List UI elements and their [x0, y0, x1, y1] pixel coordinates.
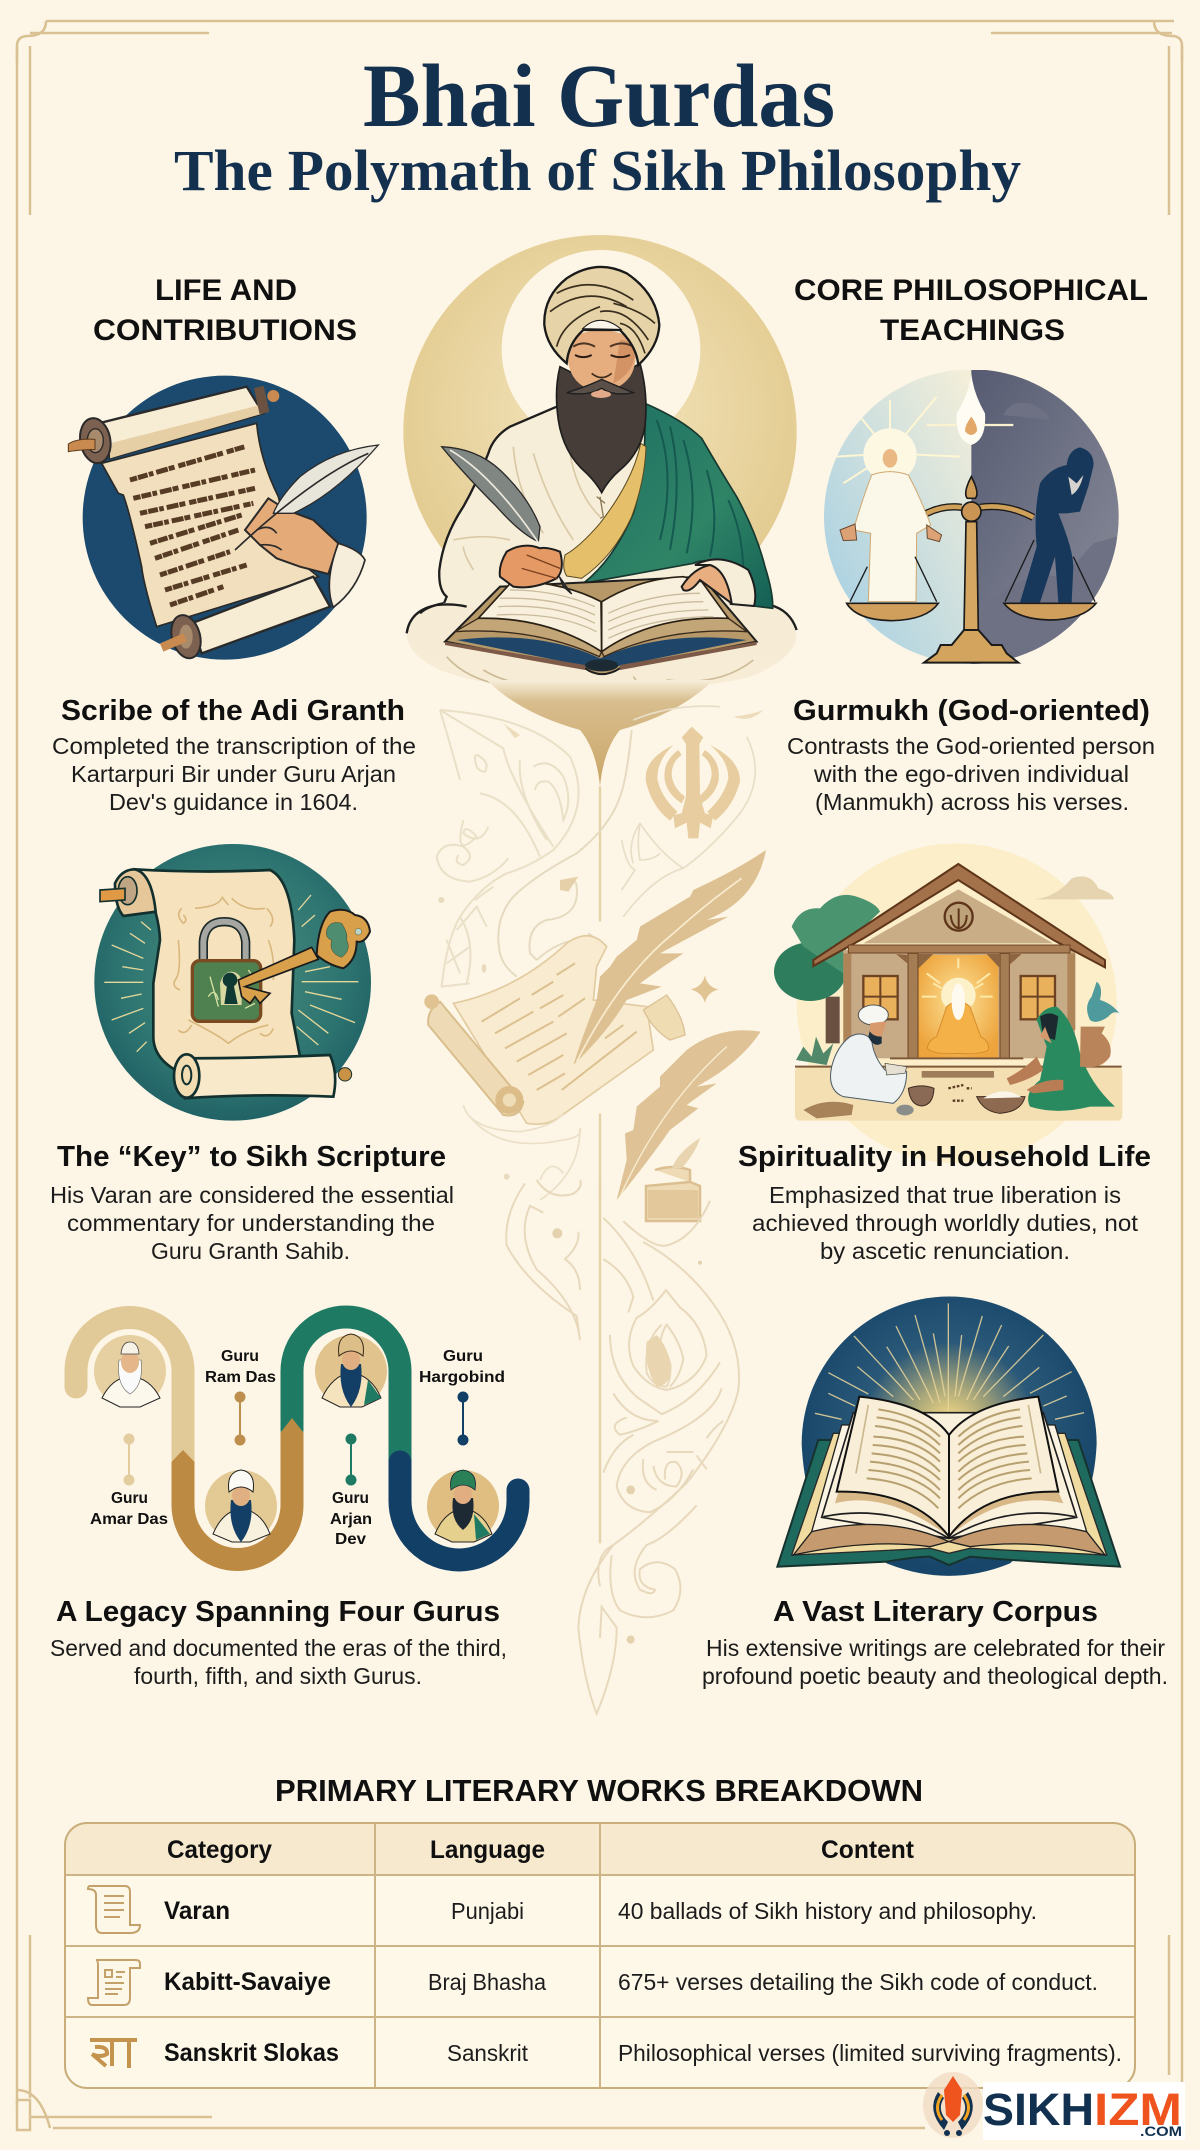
connector: Guru Ram Das — [235, 1392, 245, 1445]
connector: Guru Arjan Dev — [346, 1434, 356, 1485]
left hand with quill — [442, 447, 572, 594]
row: Varan — [88, 1886, 1037, 1933]
logo: Sikhizm.com: SIKH — [983, 2084, 1094, 2135]
row: Varan: Punjabi — [451, 1898, 524, 1924]
text block: spirituality in household life: by ascetic renunciation. — [820, 1238, 1070, 1264]
heading: core philosophical teachings — [794, 274, 1148, 347]
hand holding quill — [235, 445, 378, 607]
right hand on book — [682, 565, 732, 603]
text block: a vast literary corpus: His extensive writings are celebrated for their — [706, 1635, 1165, 1661]
row: Kabitt-Savaiye: Kabitt-Savaiye — [164, 1968, 331, 1996]
text block: spirituality in household life: Spirituality in Household Life — [738, 1141, 1151, 1173]
open book — [445, 577, 757, 674]
connector: Guru Amar Das — [124, 1434, 134, 1485]
text block: a legacy spanning four gurus: A Legacy Spanning Four Gurus — [56, 1596, 500, 1628]
row: Sanskrit Slokas — [90, 2039, 1122, 2068]
glowing meditating figure — [922, 958, 993, 1054]
portrait: Guru Arjan Dev — [315, 1334, 387, 1407]
portrait: Guru Ram Das — [205, 1470, 277, 1542]
connector: Guru Hargobind — [458, 1392, 468, 1445]
logo: Sikhizm.com — [923, 2072, 1185, 2140]
heading: life and contributions: LIFE AND — [155, 274, 297, 307]
text block: a vast literary corpus: profound poetic beauty and theological depth. — [702, 1663, 1168, 1689]
small quill feather — [617, 1030, 761, 1200]
guru name labels: Guru — [111, 1490, 148, 1507]
row: Sanskrit Slokas: Sanskrit — [447, 2040, 529, 2066]
robed body — [407, 403, 797, 717]
guru name labels: Ram Das — [205, 1369, 276, 1386]
icon: scroll and quill in navy circle — [68, 376, 378, 662]
text block: gurmukh: with the ego-driven individual — [813, 761, 1129, 787]
text block: a legacy spanning four gurus: Served and documented the eras of the third, — [50, 1635, 507, 1661]
table heading: PRIMARY LITERARY WORKS BREAKDOWN — [275, 1773, 923, 1808]
row: Kabitt-Savaiye — [88, 1960, 1098, 2005]
guru name labels: Guru — [332, 1490, 369, 1507]
logo: Sikhizm.com: IZM — [1094, 2084, 1182, 2135]
text block: gurmukh: Gurmukh (God-oriented) — [793, 695, 1150, 727]
despairing figure — [1020, 447, 1093, 602]
heading: life and contributions — [93, 274, 357, 347]
parchment scroll — [424, 936, 685, 1124]
green shawl with gold band — [564, 403, 773, 608]
heading: life and contributions: CONTRIBUTIONS — [93, 314, 357, 347]
sparkle — [691, 975, 718, 1003]
guru name labels: Arjan — [330, 1511, 372, 1528]
text block: the key to sikh scripture: commentary for understanding the — [67, 1210, 435, 1236]
portrait: Guru Amar Das — [94, 1335, 166, 1407]
table header row — [167, 1836, 915, 1864]
text block: a legacy spanning four gurus: fourth, fifth, and sixth Gurus. — [134, 1663, 422, 1689]
text block: spirituality in household life — [738, 1141, 1151, 1264]
text block: gurmukh: Contrasts the God-oriented person — [787, 733, 1155, 759]
clay jar and teal pitcher — [1080, 982, 1119, 1067]
lower scrollwork — [506, 1180, 739, 1714]
seated man — [803, 1005, 914, 1118]
right sleeve — [695, 559, 755, 606]
icon: khanda emblem — [923, 2072, 983, 2138]
khanda emblem — [646, 727, 740, 838]
large quill feather — [573, 850, 766, 1065]
logo: Sikhizm.com: .COM — [1140, 2123, 1182, 2139]
guru name labels: Dev — [335, 1531, 366, 1548]
text block: scribe of the adi granth: Completed the transcription of the — [52, 733, 416, 759]
padlock — [192, 922, 261, 1021]
heading: core philosophical teachings: TEACHINGS — [880, 314, 1065, 347]
parchment — [100, 869, 352, 1098]
ink jar — [646, 1138, 700, 1221]
text block: gurmukh — [787, 695, 1155, 815]
text block: the key to sikh scripture: His Varan are considered the essential — [50, 1182, 454, 1208]
beard — [557, 363, 646, 493]
turban — [544, 267, 659, 365]
text block: gurmukh: (Manmukh) across his verses. — [815, 789, 1129, 815]
book pages — [837, 1397, 1058, 1537]
balance scale — [847, 477, 1096, 663]
halo — [403, 235, 797, 628]
icon: household spirituality scene — [774, 843, 1122, 1163]
text block: the key to sikh scripture: Guru Granth Sahib. — [151, 1238, 350, 1264]
portrait: Guru Hargobind — [427, 1470, 499, 1542]
text block: scribe of the adi granth — [52, 695, 416, 815]
guru name labels: Amar Das — [90, 1511, 168, 1528]
text block: scribe of the adi granth: Scribe of the Adi Granth — [61, 695, 405, 727]
light flame — [927, 373, 1013, 445]
clay bowl and spices — [908, 1086, 934, 1106]
text block: spirituality in household life: Emphasized that true liberation is — [769, 1182, 1121, 1208]
table header row: Category — [167, 1836, 272, 1864]
text block: a vast literary corpus — [702, 1596, 1168, 1689]
icon: Devanagari sa syllable mark — [90, 2040, 137, 2068]
icon: key, lock and scroll — [94, 844, 371, 1121]
text block: a vast literary corpus: A Vast Literary Corpus — [773, 1596, 1098, 1628]
face — [567, 330, 636, 398]
text block: scribe of the adi granth: Kartarpuri Bir under Guru Arjan — [71, 761, 396, 787]
icon: document scroll — [88, 1960, 140, 2005]
serpentine timeline path — [76, 1317, 518, 1560]
glowing god-oriented figure — [840, 449, 942, 602]
central figure: Bhai Gurdas writing — [403, 235, 797, 717]
row: Varan: Varan — [164, 1897, 230, 1925]
title: The Polymath of Sikh Philosophy — [174, 138, 1021, 203]
row: Varan: 40 ballads of Sikh history and philosophy. — [618, 1898, 1037, 1924]
text block: a legacy spanning four gurus — [50, 1596, 507, 1689]
table header row: Content — [821, 1836, 915, 1864]
seated woman — [977, 1007, 1115, 1113]
table header row: Language — [430, 1836, 545, 1864]
text block: the key to sikh scripture: The “Key” to Sikh Scripture — [57, 1141, 446, 1173]
icon: Gurmukh and Manmukh balance — [823, 370, 1121, 667]
row: Sanskrit Slokas: Sanskrit Slokas — [164, 2039, 339, 2067]
timeline: four gurus — [76, 1317, 518, 1560]
title — [174, 47, 1021, 203]
guru name labels: Guru — [221, 1348, 259, 1365]
row: Sanskrit Slokas: Philosophical verses (limited surviving fragments). — [618, 2040, 1122, 2066]
icon: open book with rays — [777, 1296, 1120, 1576]
guru name labels: Hargobind — [419, 1369, 505, 1386]
heading: core philosophical teachings: CORE PHILOSOPHICAL — [794, 274, 1148, 307]
text block: scribe of the adi granth: Dev's guidance in 1604. — [109, 789, 358, 815]
text block: spirituality in household life: achieved through worldly duties, not — [752, 1210, 1139, 1236]
table: primary literary works — [65, 1823, 1135, 2088]
central vine ornament — [424, 680, 766, 1714]
guru name labels: Guru — [443, 1348, 483, 1365]
icon: scroll — [88, 1886, 140, 1933]
text block: the key to sikh scripture — [50, 1141, 454, 1264]
row: Kabitt-Savaiye: 675+ verses detailing the Sikh code of conduct. — [618, 1969, 1098, 1995]
golden key — [238, 910, 370, 1003]
title: Bhai Gurdas — [363, 47, 835, 146]
book cover — [777, 1440, 1120, 1567]
gold stem under the figure — [487, 680, 713, 787]
house — [795, 864, 1122, 1078]
tree — [774, 895, 880, 1065]
row: Kabitt-Savaiye: Braj Bhasha — [428, 1969, 546, 1995]
guru name labels — [90, 1348, 505, 1548]
